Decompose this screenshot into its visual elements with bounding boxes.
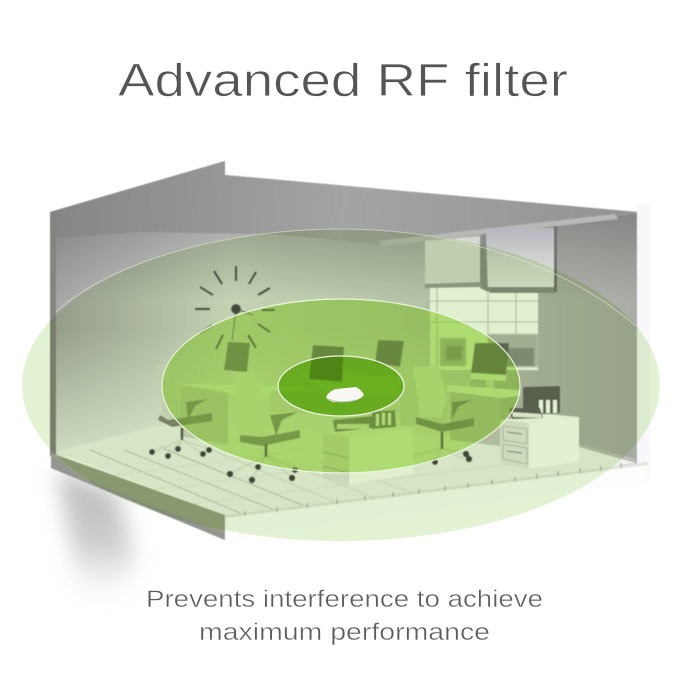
center cabinet	[323, 424, 413, 485]
monitor 3	[375, 340, 404, 367]
window	[430, 287, 538, 370]
floor	[56, 422, 648, 518]
right cabinet	[500, 414, 579, 469]
binders on right cabinet	[509, 386, 560, 419]
monitor 2	[309, 345, 344, 382]
outer coverage ellipse	[22, 229, 660, 541]
chair left	[149, 365, 212, 459]
right wall skirting	[579, 444, 636, 463]
title: Advanced RF filter	[118, 54, 568, 106]
outer faint right slab edge	[636, 204, 650, 484]
room scene	[50, 161, 650, 540]
ceiling	[50, 161, 637, 244]
monitor 1	[224, 342, 250, 372]
caption: Prevents interference to achieve	[146, 586, 543, 613]
walls	[50, 161, 637, 466]
chair right	[413, 366, 474, 465]
caption	[146, 586, 543, 646]
wall clock	[195, 266, 275, 349]
cornice	[378, 214, 618, 246]
floor shadow below room	[58, 470, 135, 600]
binders on center cabinet	[333, 410, 396, 432]
access point device	[326, 387, 364, 402]
monitor 4	[470, 343, 509, 388]
outer ellipse outline	[56, 229, 636, 326]
window blinds	[425, 226, 557, 293]
slab front face	[51, 453, 648, 540]
chair centre	[227, 372, 300, 483]
monitors	[224, 340, 509, 388]
inner coverage ellipse	[278, 356, 404, 416]
caption: maximum performance	[199, 619, 490, 646]
middle coverage ellipse	[162, 299, 520, 473]
left wall edge strip	[50, 211, 56, 456]
desks	[180, 372, 520, 446]
